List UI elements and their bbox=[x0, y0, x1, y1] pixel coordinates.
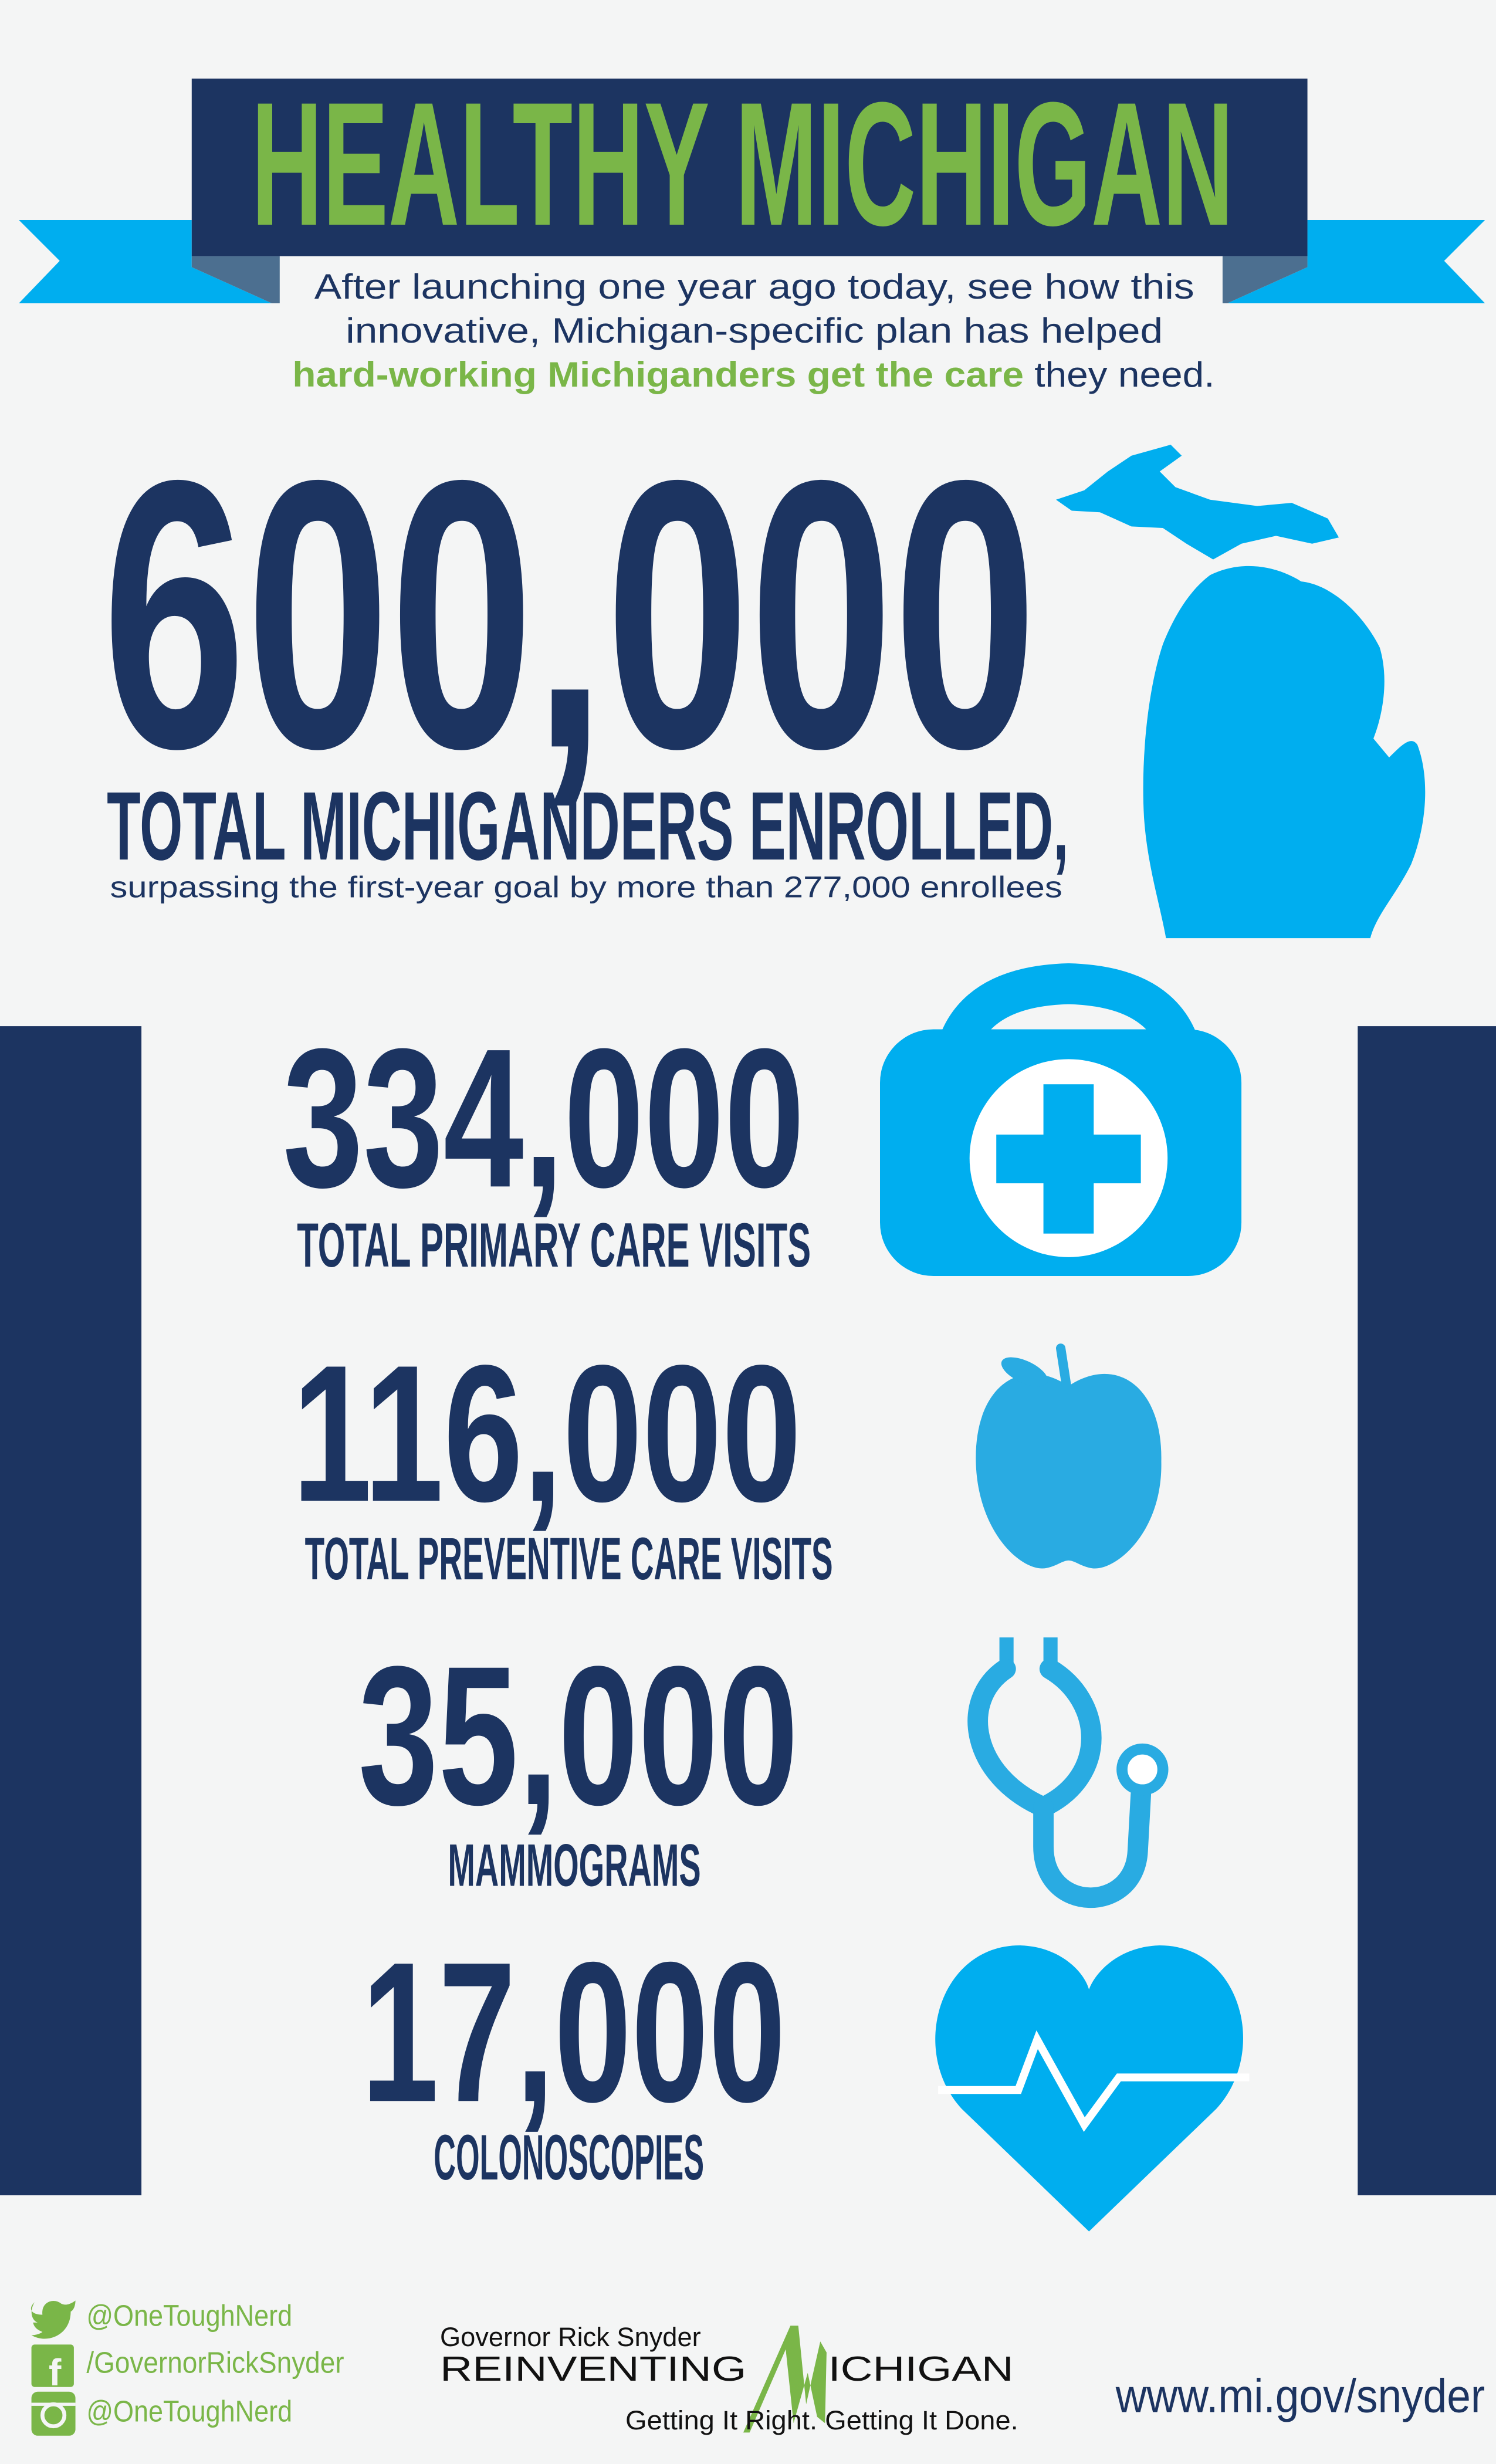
icon: heart with ecg line bbox=[935, 1945, 1249, 2232]
subtitle text block: innovative, Michigan-specific plan has helped bbox=[346, 310, 1163, 350]
stat: preventive care visits: 116,000 bbox=[292, 1325, 801, 1542]
icon: michigan map bbox=[1056, 445, 1425, 938]
footer: reinventing michigan logo: Getting It Right. Getting It Done. bbox=[625, 2405, 1018, 2435]
stat: colonoscopies: COLONOSCOPIES bbox=[434, 2122, 704, 2194]
subtitle text block bbox=[292, 266, 1215, 394]
footer: reinventing michigan logo: ICHIGAN bbox=[828, 2350, 1014, 2388]
stat: colonoscopies bbox=[361, 1921, 786, 2194]
ribbon fold left bbox=[192, 256, 280, 303]
banner panel bbox=[192, 79, 1308, 256]
stat: mammograms bbox=[358, 1624, 798, 1898]
ribbon fold right bbox=[1223, 256, 1308, 303]
footer: reinventing michigan logo: Governor Rick Snyder bbox=[440, 2322, 701, 2352]
stat: preventive care visits bbox=[292, 1325, 833, 1592]
stat: primary care visits: 334,000 bbox=[283, 1007, 804, 1228]
big stat: 600,000 enrolled: surpassing the first-year goal by more than 277,000 enrollees bbox=[110, 870, 1062, 903]
subtitle text block: After launching one year ago today, see how this bbox=[314, 266, 1194, 306]
social handles: @OneToughNerd bbox=[86, 2299, 292, 2332]
stat: primary care visits: TOTAL PRIMARY CARE VISITS bbox=[297, 1210, 811, 1280]
icon: stethoscope bbox=[978, 1637, 1163, 1898]
ribbon right end bbox=[1227, 220, 1485, 303]
footer: social links bbox=[31, 2299, 344, 2436]
stat: mammograms: MAMMOGRAMS bbox=[448, 1832, 701, 1898]
ribbon: header banner bbox=[19, 65, 1485, 303]
footer: reinventing michigan logo bbox=[440, 2322, 1018, 2435]
stat: colonoscopies: 17,000 bbox=[361, 1921, 786, 2144]
footer: reinventing michigan logo: REINVENTING bbox=[440, 2350, 746, 2388]
icon: apple bbox=[976, 1348, 1162, 1569]
big stat: 600,000 enrolled: 600,000 bbox=[102, 401, 1037, 827]
stat: preventive care visits: TOTAL PREVENTIVE CARE VISITS bbox=[305, 1525, 833, 1592]
stat: primary care visits bbox=[283, 1007, 811, 1280]
big stat: 600,000 enrolled bbox=[102, 401, 1068, 903]
side bar left bbox=[0, 1026, 141, 2195]
social handles: /GovernorRickSnyder bbox=[86, 2346, 344, 2380]
icon: facebook: f bbox=[49, 2351, 62, 2394]
icon: twitter bbox=[31, 2300, 76, 2339]
subtitle text block: hard-working Michiganders get the care they need. bbox=[292, 354, 1215, 394]
social handles: @OneToughNerd bbox=[86, 2395, 292, 2428]
social handles bbox=[86, 2299, 344, 2428]
stat: mammograms: 35,000 bbox=[358, 1624, 798, 1846]
ribbon left end bbox=[19, 220, 272, 303]
side bar right bbox=[1358, 1026, 1496, 2195]
icon: instagram bbox=[32, 2392, 76, 2436]
icon: facebook bbox=[32, 2344, 74, 2394]
icon: medical bag bbox=[880, 984, 1241, 1276]
